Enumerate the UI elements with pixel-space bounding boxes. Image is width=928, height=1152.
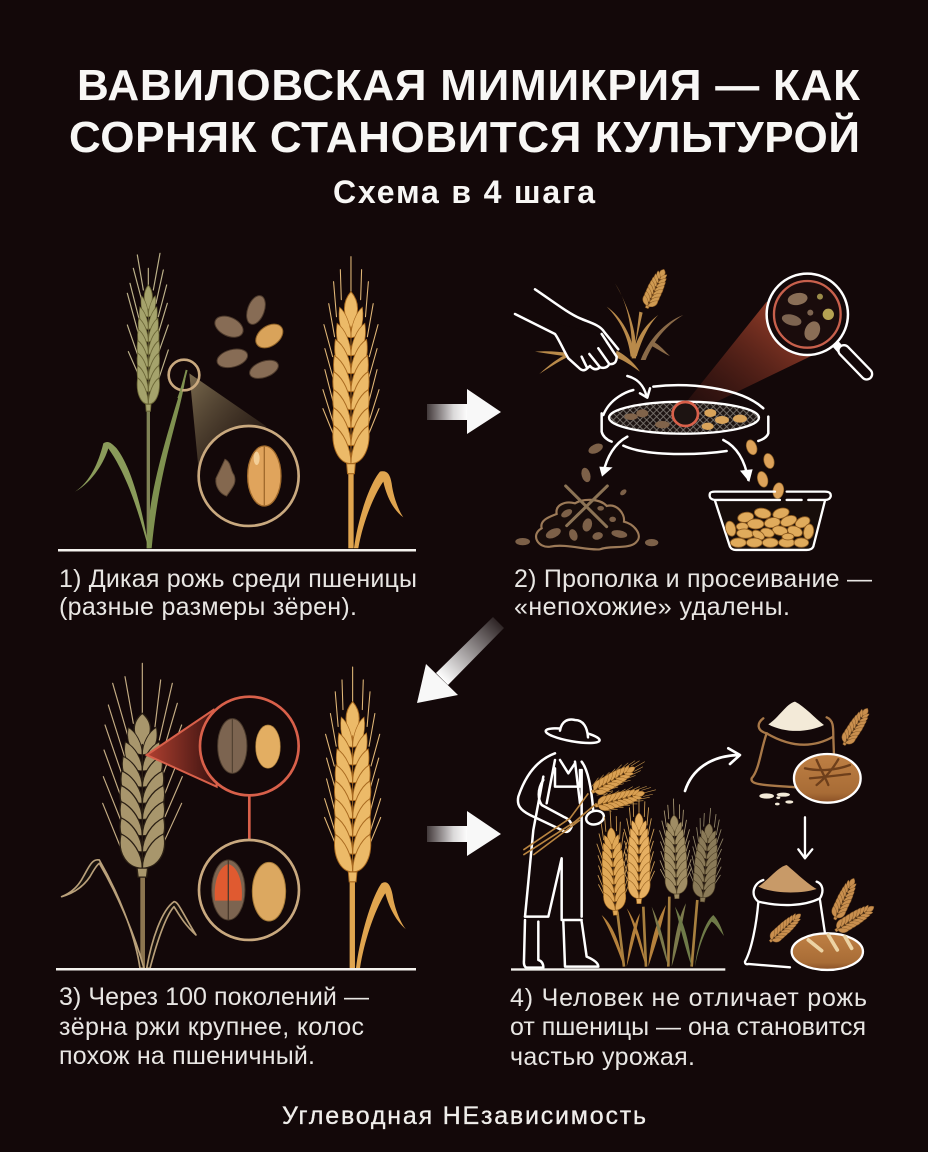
rye plant mimic <box>62 663 196 968</box>
arrowheads <box>599 467 753 482</box>
round loaf <box>794 754 861 803</box>
flour sack <box>752 702 873 787</box>
ground line 1 <box>58 549 416 552</box>
magnifier <box>767 274 867 374</box>
caption 4: частью урожая. <box>510 1043 695 1071</box>
wheat bunch in hands <box>523 754 658 855</box>
arrow 3 to 4 <box>427 811 501 856</box>
scattered grains <box>211 293 287 382</box>
subtitle: Схема в 4 шага <box>333 174 595 210</box>
discarded pile <box>536 486 639 549</box>
arrow 2 to 3 <box>417 617 504 703</box>
ground line 3 <box>56 968 416 970</box>
flour crumbs <box>759 793 793 805</box>
hand <box>515 289 618 370</box>
caption 3 <box>59 983 369 1070</box>
beam to magnifier <box>687 302 813 403</box>
caption 3: зёрна ржи крупнее, колос <box>59 1013 364 1041</box>
falling grains <box>515 438 785 546</box>
down arrow <box>798 817 812 858</box>
caption 1: (разные размеры зёрен). <box>59 593 357 621</box>
caption 3: похож на пшеничный. <box>59 1042 315 1070</box>
wheat plant <box>325 667 406 968</box>
panel 3: rye after 100 generations <box>62 663 406 968</box>
title: СОРНЯК СТАНОВИТСЯ КУЛЬТУРОЙ <box>69 111 860 162</box>
long loaf <box>792 933 863 970</box>
panel 4: harvest and bread <box>511 702 878 971</box>
bowl of grain <box>710 492 831 550</box>
caption 2: 2) Прополка и просеивание — <box>514 565 872 593</box>
panel 1: wild rye among wheat <box>75 253 403 548</box>
caption 4: 4) Человек не отличает рожь <box>510 984 867 1012</box>
upper comparison circle <box>200 697 299 795</box>
second sack <box>745 865 825 967</box>
arrow 1 to 2 <box>427 389 501 434</box>
zoom beam <box>147 710 217 787</box>
caption 4: от пшеницы — она становится <box>510 1013 866 1041</box>
title: ВАВИЛОВСКАЯ МИМИКРИЯ — КАК <box>77 61 860 110</box>
caption 3: 3) Через 100 поколений — <box>59 983 369 1011</box>
bottom wheat ears <box>766 875 878 946</box>
farmer <box>518 720 605 968</box>
title <box>69 61 860 162</box>
wild rye plant <box>75 253 187 548</box>
curved arrow <box>685 748 740 791</box>
sieve <box>602 385 768 454</box>
footer: Углеводная НЕзависимость <box>282 1102 646 1130</box>
caption 2 <box>514 565 872 621</box>
ground line 4 <box>511 968 725 971</box>
lower comparison circle <box>199 840 299 940</box>
sorting arrows <box>603 376 748 480</box>
connector <box>248 795 251 840</box>
field of four ears <box>595 795 726 967</box>
wheat plant <box>323 257 403 548</box>
caption 2: «непохожие» удалены. <box>514 593 790 621</box>
weeds and wheat ear <box>535 266 683 374</box>
panel 2: weeding and sieving <box>515 266 867 550</box>
caption 4 <box>510 984 867 1071</box>
magnifier beam and circles <box>169 360 299 526</box>
caption 1: 1) Дикая рожь среди пшеницы <box>59 565 417 593</box>
caption 1 <box>59 565 417 621</box>
